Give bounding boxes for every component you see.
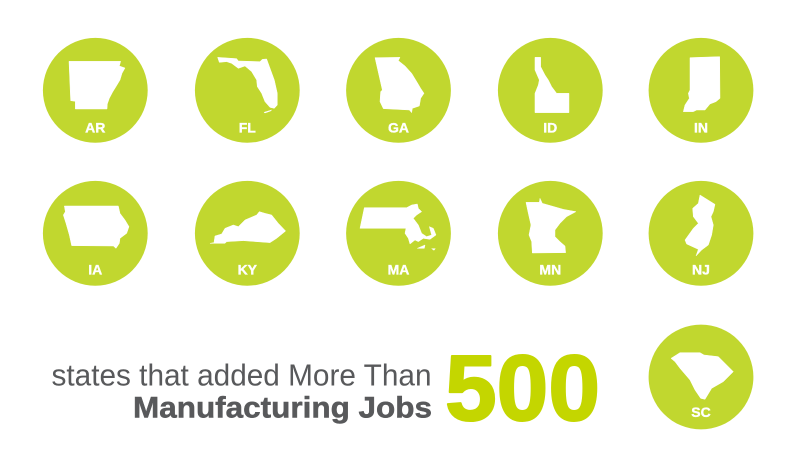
badge: Florida — [195, 38, 300, 143]
badge: Kentucky — [195, 181, 300, 286]
badge: Massachusetts — [346, 181, 451, 286]
badge: New Jersey — [649, 181, 753, 286]
badge: Iowa — [43, 181, 148, 286]
badge: Minnesota: MN — [539, 261, 561, 277]
big number: 500: 500 — [445, 336, 600, 440]
heading: states that added more than: states that added More Than — [52, 358, 432, 392]
badge: Minnesota — [498, 181, 603, 286]
badge: Massachusetts: MA — [388, 261, 409, 277]
badge: Kentucky: KY — [238, 261, 258, 277]
badge: Iowa: IA — [88, 261, 102, 277]
badge: Indiana — [649, 38, 753, 143]
badge: Idaho — [498, 38, 603, 143]
badge: Indiana: IN — [694, 120, 708, 136]
badge: Arkansas — [43, 38, 148, 143]
badge: Idaho: ID — [543, 120, 557, 136]
badge: Arkansas: AR — [85, 120, 105, 136]
badge: South Carolina — [649, 325, 753, 429]
badge: Georgia — [346, 38, 451, 143]
badge: South Carolina: SC — [691, 404, 711, 420]
badge: New Jersey: NJ — [692, 261, 710, 277]
heading: manufacturing jobs: Manufacturing Jobs — [133, 392, 432, 424]
badge: Florida: FL — [239, 120, 256, 136]
badge: Georgia: GA — [388, 120, 409, 136]
